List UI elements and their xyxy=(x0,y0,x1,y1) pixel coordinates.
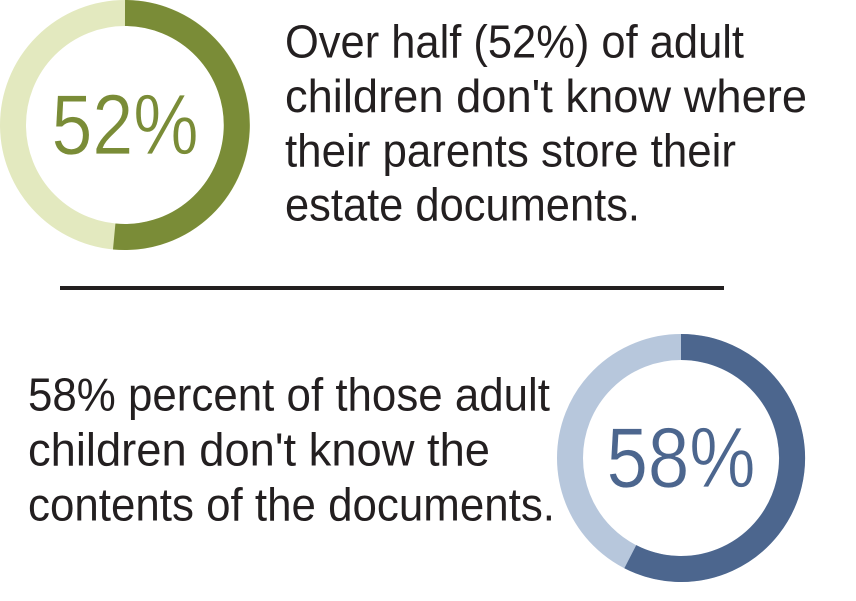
divider line xyxy=(60,286,724,290)
text block: top statement: Over half (52%) of adult xyxy=(285,16,744,68)
text block: top statement: children don't know where xyxy=(285,70,807,122)
donut chart: 58% xyxy=(570,347,792,569)
text block: top statement: estate documents. xyxy=(285,178,640,230)
text block: top statement xyxy=(285,16,807,230)
donut chart: 52%: 52% xyxy=(52,78,198,173)
donut chart: 58%: 58% xyxy=(606,411,756,506)
text block: bottom statement: children don't know the xyxy=(28,424,490,476)
donut chart: 52% xyxy=(13,13,237,237)
text block: top statement: their parents store their xyxy=(285,124,736,176)
text block: bottom statement xyxy=(28,368,555,530)
text block: bottom statement: 58% percent of those adult xyxy=(28,368,550,420)
text block: bottom statement: contents of the documents. xyxy=(28,478,555,530)
